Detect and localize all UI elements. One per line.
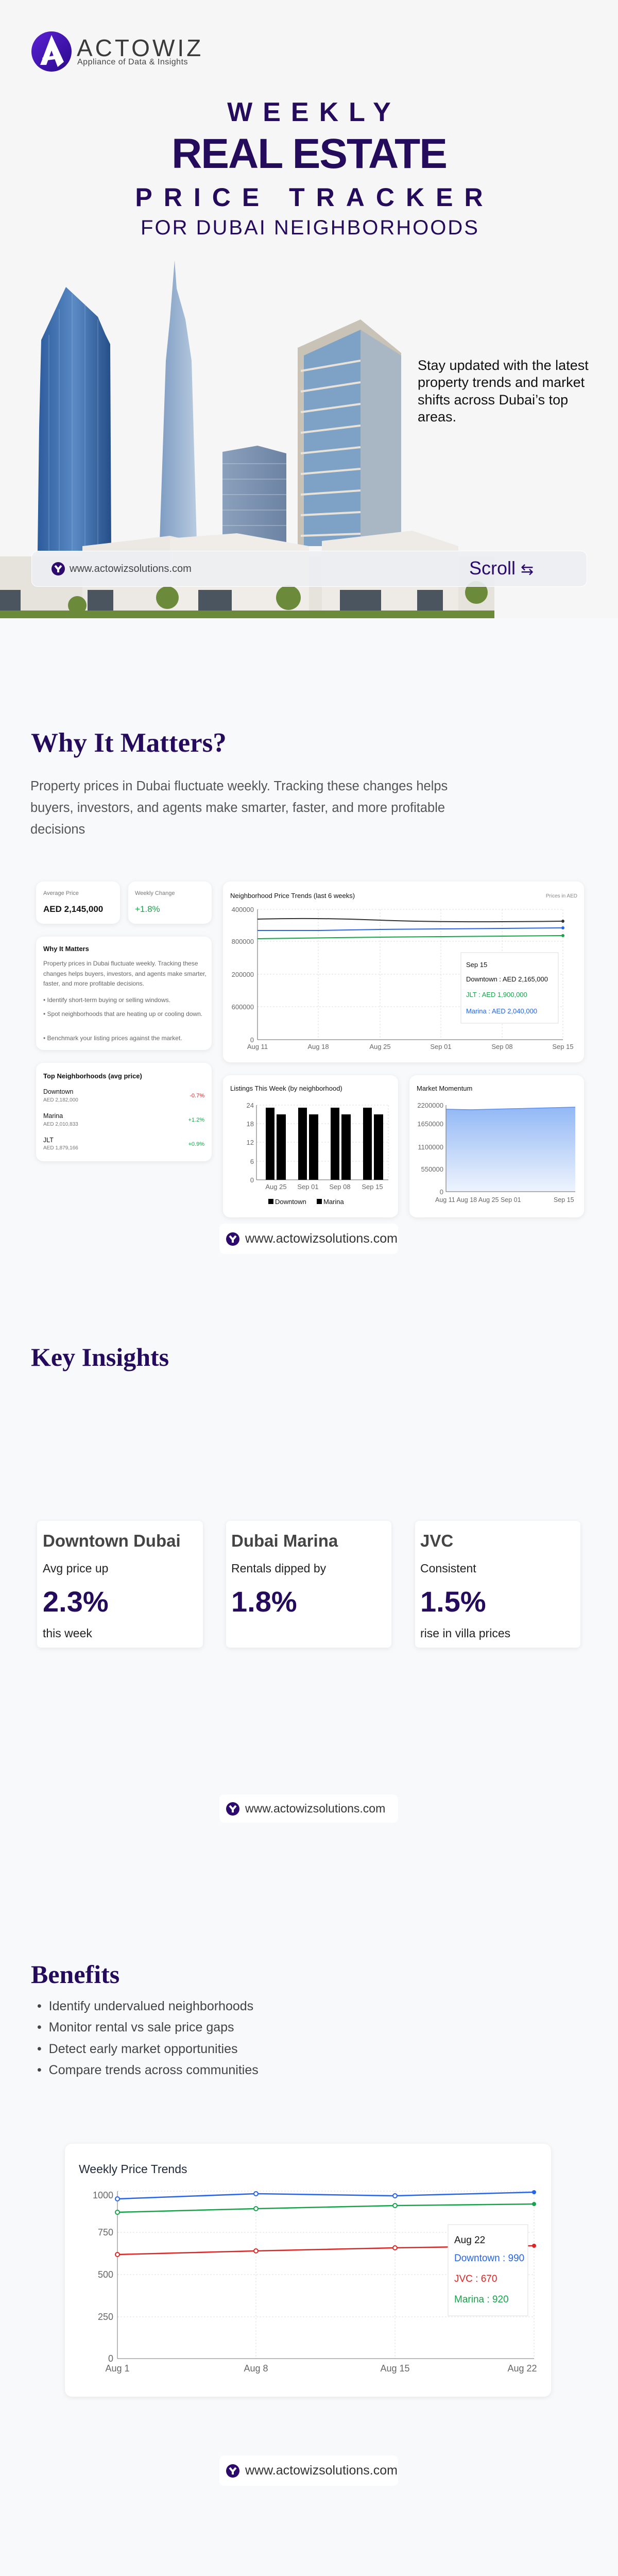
chart: neighborhood price trends: 0 (250, 1036, 254, 1044)
logo: Appliance of Data & Insights (77, 58, 188, 66)
chart: weekly price trends: 1000 (93, 2190, 113, 2200)
hero section (0, 0, 618, 618)
card: why it matters text: • Benchmark your listing prices against the market. (43, 1035, 182, 1042)
chart: weekly price trends: Aug 8 (244, 2363, 268, 2374)
card: weekly change: Weekly Change (135, 890, 175, 896)
insight card: downtown: Downtown Dubai (43, 1531, 181, 1550)
chart: neighborhood price trends: Prices in AED (546, 893, 577, 899)
paragraph: Property prices in Dubai fluctuate weekly. Tracking these changes helps buyers, investors, and agents make smarter, faster, and more profitable decisions (30, 779, 448, 837)
chart: weekly price trends: 750 (98, 2227, 113, 2238)
card: top neighborhoods: JLT (43, 1137, 54, 1144)
url pill (219, 1794, 398, 1823)
url pill (219, 2455, 398, 2486)
url pill: www.actowizsolutions.com (245, 2463, 398, 2478)
title block: WEEKLY (227, 97, 401, 127)
chart: listings this week: Sep 15 (362, 1183, 383, 1191)
chart: listings this week: 24 (247, 1101, 254, 1109)
chart: neighborhood price trends: Aug 11 (247, 1043, 268, 1050)
url pill (219, 1224, 398, 1254)
insight card: marina: Rentals dipped by (231, 1562, 326, 1575)
card: top neighborhoods: Top Neighborhoods (avg price) (43, 1072, 142, 1080)
card: top neighborhoods (36, 1063, 212, 1161)
chart: neighborhood price trends: 400000 (232, 906, 254, 913)
insight card: jvc: 1.5% (420, 1585, 486, 1618)
url: www.actowizsolutions.com (70, 563, 192, 574)
chart: weekly price trends: Marina : 920 (454, 2294, 509, 2305)
url pill: www.actowizsolutions.com (245, 1231, 398, 1246)
hero text: Stay updated with the latest property trends and market shifts across Dubai’s top areas. (418, 358, 589, 425)
low houses (0, 556, 494, 618)
chart: weekly price trends (65, 2144, 551, 2397)
card: why it matters text: • Identify short-term buying or selling windows. (43, 996, 170, 1004)
card: weekly change: +1.8% (135, 904, 160, 914)
title block: PRICE TRACKER (135, 183, 494, 212)
chart: weekly price trends: JVC : 670 (454, 2274, 497, 2284)
card: weekly change (128, 882, 212, 924)
chart: market momentum: 2200000 (417, 1101, 443, 1109)
benefits list: • Compare trends across communities (37, 2063, 259, 2077)
logo (31, 31, 203, 72)
chart: weekly price trends: 500 (98, 2269, 113, 2280)
chart: market momentum: Sep 15 (554, 1196, 574, 1204)
insight card: marina: 1.8% (231, 1585, 297, 1618)
illustration: buildings (0, 261, 494, 618)
chart: neighborhood price trends: JLT : AED 1,900,000 (466, 991, 527, 998)
heading: key insights: Key Insights (31, 1343, 169, 1371)
chart: listings this week: Listings This Week (by neighborhood) (230, 1084, 342, 1092)
insight card: jvc (415, 1521, 580, 1648)
chart: market momentum: 0 (440, 1188, 443, 1196)
chart: listings this week: Aug 25 (265, 1183, 287, 1191)
chart: listings this week: 18 (247, 1120, 254, 1128)
chart: neighborhood price trends: Aug 25 (369, 1043, 391, 1050)
chart: neighborhood price trends: Aug 18 (307, 1043, 329, 1050)
chart: neighborhood price trends: Downtown : AED 2,165,000 (466, 975, 548, 983)
chart: neighborhood price trends: Sep 15 (466, 961, 487, 969)
card: top neighborhoods: -0.7% (190, 1093, 204, 1099)
chart: weekly price trends: Aug 22 (454, 2235, 485, 2246)
title block: FOR DUBAI NEIGHBORHOODS (141, 216, 479, 239)
chart: market momentum: Market Momentum (417, 1084, 472, 1092)
insight card: marina: Dubai Marina (231, 1531, 338, 1550)
chart: listings this week (223, 1075, 398, 1217)
url bar with scroll (31, 551, 587, 587)
chart: weekly price trends: 0 (108, 2353, 113, 2364)
chart: neighborhood price trends: Neighborhood Price Trends (last 6 weeks) (230, 892, 355, 900)
insight card: jvc: JVC (420, 1531, 453, 1550)
card: average price (36, 882, 120, 924)
benefits list: • Detect early market opportunities (37, 2042, 237, 2056)
chart: weekly price trends: Aug 15 (380, 2363, 410, 2374)
chart: listings this week: Sep 01 (297, 1183, 319, 1191)
logo: ACTOWIZ (77, 35, 203, 61)
chart: neighborhood price trends: Sep 08 (491, 1043, 513, 1050)
card: why it matters text (36, 937, 212, 1050)
heading: benefits: Benefits (31, 1960, 119, 1989)
chart: neighborhood price trends: Sep 01 (430, 1043, 452, 1050)
chart: weekly price trends: Downtown : 990 (454, 2253, 524, 2264)
chart: market momentum (409, 1075, 584, 1217)
heading: why it matters: Why It Matters? (31, 728, 227, 758)
insight card: downtown (37, 1521, 203, 1648)
chart: neighborhood price trends: 600000 (232, 1003, 254, 1011)
card: top neighborhoods: Downtown (43, 1088, 73, 1095)
chart: listings this week: Sep 08 (329, 1183, 351, 1191)
card: top neighborhoods: Marina (43, 1112, 63, 1120)
card: top neighborhoods: AED 2,010,833 (43, 1122, 78, 1127)
chart: market momentum: 1650000 (417, 1120, 443, 1128)
insight card: jvc: Consistent (420, 1562, 476, 1575)
chart: neighborhood price trends: 200000 (232, 971, 254, 978)
card: average price: AED 2,145,000 (43, 904, 103, 914)
chart: market momentum: 550000 (421, 1165, 443, 1173)
scroll label: Scroll ⇆ (469, 557, 534, 579)
title block: REAL ESTATE (171, 130, 447, 177)
insight card: jvc: rise in villa prices (420, 1626, 510, 1640)
benefits list: • Monitor rental vs sale price gaps (37, 2020, 234, 2035)
chart: listings this week: 0 (250, 1176, 254, 1184)
chart: weekly price trends: Aug 22 (507, 2363, 537, 2374)
card: why it matters text: Why It Matters (43, 945, 89, 953)
card: average price: Average Price (43, 890, 79, 896)
chart: listings this week: 12 (247, 1139, 254, 1146)
chart: listings this week: Marina (323, 1198, 345, 1206)
card: why it matters text: • Spot neighborhoods that are heating up or cooling down. (43, 1010, 202, 1018)
insight card: downtown: Avg price up (43, 1562, 108, 1575)
chart: weekly price trends: 250 (98, 2312, 113, 2322)
chart: market momentum: Aug 11 Aug 18 Aug 25 Sep 01 (435, 1196, 521, 1204)
card: top neighborhoods: AED 1,879,166 (43, 1145, 78, 1151)
insight card: marina (226, 1521, 391, 1648)
chart: neighborhood price trends: Sep 15 (552, 1043, 574, 1050)
chart: listings this week: Downtown (275, 1198, 306, 1206)
insight card: downtown: 2.3% (43, 1585, 109, 1618)
card: top neighborhoods: AED 2,182,000 (43, 1097, 78, 1103)
url pill: www.actowizsolutions.com (245, 1802, 385, 1815)
benefits list (37, 1999, 259, 2077)
title block (135, 97, 494, 239)
chart: weekly price trends: Aug 1 (105, 2363, 130, 2374)
chart: neighborhood price trends: Marina : AED 2,040,000 (466, 1007, 537, 1015)
chart: neighborhood price trends (223, 882, 584, 1062)
chart: market momentum: 1100000 (418, 1143, 443, 1151)
card: top neighborhoods: +1.2% (188, 1117, 204, 1123)
card: top neighborhoods: +0.9% (188, 1141, 204, 1147)
benefits list: • Identify undervalued neighborhoods (37, 1999, 253, 2013)
chart: neighborhood price trends: 800000 (232, 938, 254, 945)
chart: weekly price trends: Weekly Price Trends (79, 2162, 187, 2176)
card: why it matters text: Property prices in Dubai fluctuate weekly. Tracking these changes helps buyers, investors, and agents make smarter, faster, and more profitable decisions. (43, 960, 207, 987)
chart: listings this week: 6 (250, 1158, 254, 1165)
insight card: downtown: this week (43, 1626, 92, 1640)
